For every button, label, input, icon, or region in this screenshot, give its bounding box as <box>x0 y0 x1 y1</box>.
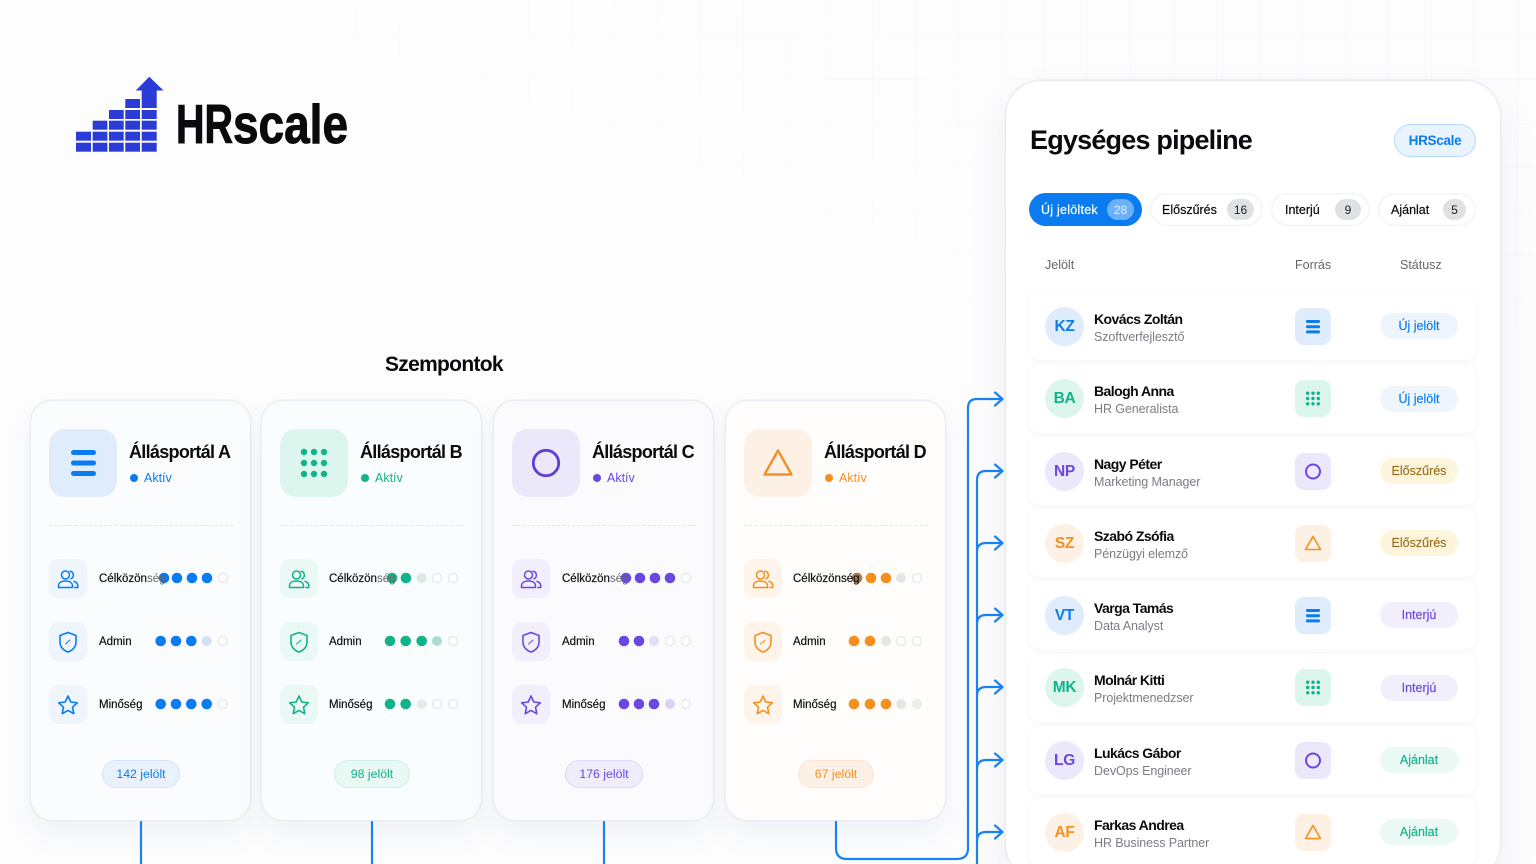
avatar <box>1045 524 1084 563</box>
status: Új jelölt <box>1398 319 1440 333</box>
status dot <box>825 474 833 482</box>
connector: trunk to rows <box>977 464 1002 864</box>
label: Minőség: Minőség <box>329 699 372 711</box>
avatar <box>1045 596 1084 635</box>
icon: portal D triangle <box>744 429 812 497</box>
status: Előszűrés <box>1392 464 1446 478</box>
role: HR Business Partner <box>1094 836 1209 850</box>
label: Minőség: Minőség <box>793 699 836 711</box>
tab: Új jelöltek: 28 <box>1114 203 1127 217</box>
status: Új jelölt <box>1398 392 1440 406</box>
status: Interjú <box>1402 681 1436 695</box>
avatar: NP <box>1054 463 1075 480</box>
status label: Aktív <box>839 471 867 485</box>
badge: candidates: 98 jelölt <box>351 767 393 781</box>
avatar: KZ <box>1054 318 1075 335</box>
status: Ajánlat <box>1400 825 1438 839</box>
badge: candidates <box>102 760 180 788</box>
tab: Ajánlat: Ajánlat <box>1391 203 1429 217</box>
status <box>1380 747 1458 773</box>
role: Pénzügyi elemző <box>1094 547 1188 561</box>
badge: candidates: 67 jelölt <box>815 767 857 781</box>
icon: audience <box>744 559 782 598</box>
connector: portal A <box>140 822 142 864</box>
avatar: LG <box>1054 752 1075 769</box>
connector: portal B <box>371 822 373 864</box>
label: Minőség: Minőség <box>99 699 142 711</box>
icon: admin <box>280 622 318 661</box>
rating: Célközönség <box>158 572 228 584</box>
badge: candidates <box>565 760 643 788</box>
row: Farkas Andrea <box>1029 798 1476 864</box>
avatar <box>1045 379 1084 418</box>
name: Balogh Anna <box>1094 383 1174 399</box>
status <box>1380 458 1458 484</box>
source icon <box>1295 308 1331 345</box>
avatar <box>1045 452 1084 491</box>
tab: Ajánlat <box>1378 193 1476 226</box>
status <box>1380 819 1458 845</box>
status <box>1380 602 1458 628</box>
name: Kovács Zoltán <box>1094 310 1183 326</box>
status <box>1380 675 1458 701</box>
role: Projektmenedzser <box>1094 691 1193 705</box>
status: Előszűrés <box>1392 536 1446 550</box>
tab: Ajánlat: 5 <box>1451 203 1458 217</box>
icon: audience <box>49 559 87 598</box>
label: Célközönség: Célközönség <box>562 573 628 585</box>
icon: quality <box>744 685 782 724</box>
avatar <box>1045 307 1084 346</box>
title: Állásportál D <box>824 442 926 462</box>
badge: candidates <box>798 760 874 788</box>
name: Molnár Kitti <box>1094 672 1164 688</box>
avatar <box>1045 668 1084 707</box>
label: Célközönség: Célközönség <box>329 573 396 585</box>
tab: Előszűrés: Előszűrés <box>1162 203 1217 217</box>
icon: rising bar blocks with arrow <box>76 77 164 152</box>
row: Szabó Zsófia <box>1029 509 1476 577</box>
status: Ajánlat <box>1400 753 1438 767</box>
column header: Forrás: Forrás <box>1295 258 1331 272</box>
status label: Aktív <box>375 471 403 485</box>
panel: Állásportál C <box>493 400 714 821</box>
rating: Minőség <box>155 698 228 710</box>
badge: candidates: 176 jelölt <box>579 767 629 781</box>
rating: Minőség <box>618 698 691 710</box>
source icon <box>1295 525 1331 562</box>
tab: Új jelöltek: Új jelöltek <box>1041 203 1098 217</box>
heading: Szempontok: Szempontok <box>385 353 503 376</box>
badge: HRScale <box>1394 124 1476 157</box>
status <box>1380 313 1458 339</box>
label: Minőség: Minőség <box>562 699 605 711</box>
panel title: Egységes pipeline <box>1030 125 1252 155</box>
status label: Aktív <box>144 471 172 485</box>
rating: Admin <box>848 636 922 646</box>
status: Interjú <box>1402 608 1436 622</box>
row: Molnár Kitti <box>1029 654 1476 722</box>
icon: audience <box>280 559 318 598</box>
rating: Admin <box>384 636 458 646</box>
source icon <box>1295 669 1331 706</box>
row: Varga Tamás <box>1029 581 1476 649</box>
status label: Aktív <box>607 471 635 485</box>
avatar: MK <box>1053 679 1076 696</box>
tab: Előszűrés: 16 <box>1234 203 1247 217</box>
status dot <box>593 474 601 482</box>
tab: Előszűrés <box>1150 193 1263 226</box>
column header: Jelölt: Jelölt <box>1045 258 1074 272</box>
row: Nagy Péter <box>1029 437 1476 505</box>
badge: candidates: 142 jelölt <box>116 767 166 781</box>
role: HR Generalista <box>1094 402 1178 416</box>
column header: Státusz: Státusz <box>1400 258 1442 272</box>
rating: Célközönség <box>852 572 922 584</box>
status <box>1380 386 1458 412</box>
status dot <box>361 474 369 482</box>
icon: admin <box>49 622 87 661</box>
panel: Egységes pipeline <box>1005 80 1501 864</box>
name: Varga Tamás <box>1094 600 1173 616</box>
source icon <box>1295 814 1331 851</box>
source icon <box>1295 742 1331 779</box>
rating: Admin <box>618 636 691 646</box>
panel: Állásportál A <box>30 400 251 821</box>
icon: portal C circle <box>512 429 580 497</box>
tab: Interjú <box>1271 193 1370 226</box>
avatar: BA <box>1054 390 1075 407</box>
label: Admin: Admin <box>793 636 826 648</box>
source icon <box>1295 597 1331 634</box>
rating: Admin <box>155 636 228 646</box>
label: Admin: Admin <box>562 636 595 648</box>
connector: portal D to first row <box>836 392 1002 859</box>
title: Állásportál A <box>129 442 230 462</box>
icon: quality <box>49 685 87 724</box>
role: DevOps Engineer <box>1094 764 1191 778</box>
title: Állásportál C <box>592 442 694 462</box>
rating: Célközönség <box>620 572 691 584</box>
role: Marketing Manager <box>1094 475 1200 489</box>
rating: Minőség <box>848 698 922 710</box>
avatar: AF <box>1054 824 1075 841</box>
icon: quality <box>512 685 550 724</box>
label: Admin: Admin <box>329 636 362 648</box>
panel: Állásportál D <box>725 400 946 821</box>
row: Balogh Anna <box>1029 365 1476 433</box>
row: Lukács Gábor <box>1029 726 1476 794</box>
role: Szoftverfejlesztő <box>1094 330 1184 344</box>
source icon <box>1295 453 1331 490</box>
badge: candidates <box>334 760 410 788</box>
status dot <box>130 474 138 482</box>
label: Célközönség: Célközönség <box>793 573 859 585</box>
label: Admin: Admin <box>99 636 132 648</box>
icon: portal A menu <box>49 429 117 497</box>
name: Lukács Gábor <box>1094 744 1181 760</box>
logo: HRscale <box>76 76 348 155</box>
name: Nagy Péter <box>1094 456 1162 472</box>
rating: Minőség <box>384 698 458 710</box>
name: Farkas Andrea <box>1094 816 1184 832</box>
icon: quality <box>280 685 318 724</box>
name: Szabó Zsófia <box>1094 528 1174 544</box>
connector: portal C <box>603 822 605 864</box>
status <box>1380 530 1458 556</box>
role: Data Analyst <box>1094 619 1163 633</box>
avatar <box>1045 741 1084 780</box>
avatar: VT <box>1055 607 1074 624</box>
icon: admin <box>744 622 782 661</box>
avatar: SZ <box>1055 535 1074 552</box>
label: Célközönség: Célközönség <box>99 573 166 585</box>
tab: Interjú: Interjú <box>1285 203 1320 217</box>
panel: Állásportál B <box>261 400 482 821</box>
source icon <box>1295 380 1331 417</box>
tab: Interjú: 9 <box>1345 203 1351 217</box>
icon: admin <box>512 622 550 661</box>
icon: audience <box>512 559 550 598</box>
badge: HRScale: HRScale <box>1409 133 1461 148</box>
icon: portal B grid <box>280 429 348 497</box>
title: Állásportál B <box>360 442 462 462</box>
avatar <box>1045 813 1084 852</box>
rating: Célközönség <box>386 572 458 584</box>
row: Kovács Zoltán <box>1029 292 1476 360</box>
tab: Új jelöltek <box>1029 193 1142 226</box>
